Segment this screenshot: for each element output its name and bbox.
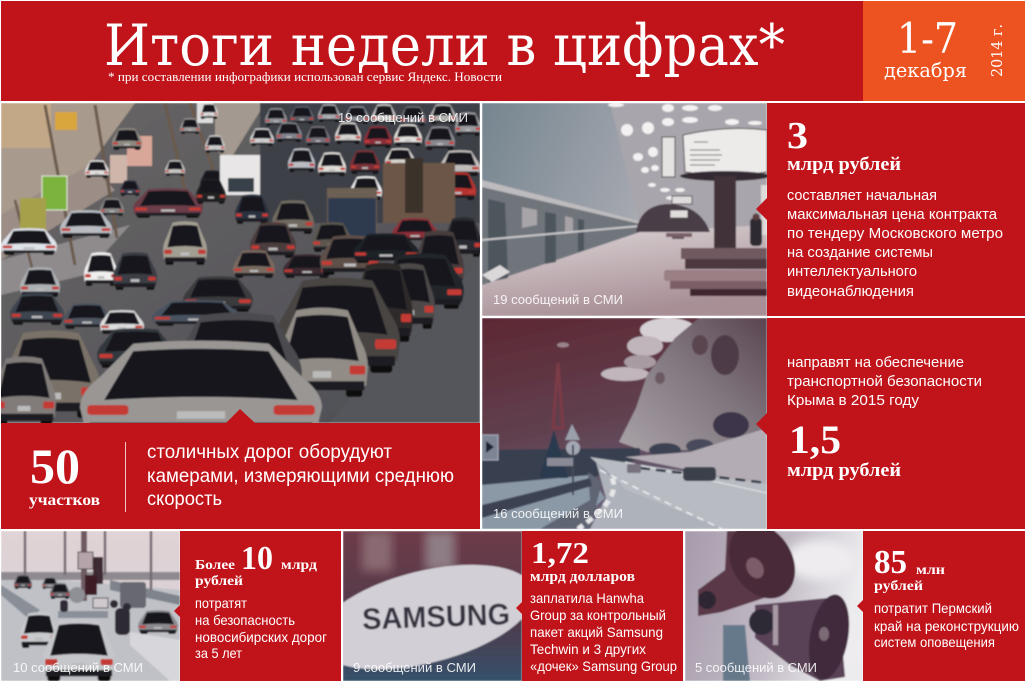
- poles: [25, 531, 151, 590]
- concrete barrier: [130, 632, 180, 681]
- amount heading: млрд: [281, 558, 317, 573]
- panel: 50 sections: [1, 409, 480, 529]
- cars far: [85, 103, 481, 223]
- unit: млрд рублей: [787, 461, 901, 481]
- amount heading: 10: [241, 540, 273, 577]
- description: систем оповещения: [874, 634, 995, 650]
- cars on road: [627, 464, 716, 481]
- pointer: [226, 409, 255, 423]
- description: [787, 354, 982, 409]
- cliff: [619, 318, 767, 452]
- ceiling lamps: [608, 103, 762, 200]
- description: потратит Пермский: [874, 600, 992, 616]
- upper horn: [697, 531, 796, 616]
- guard rail: [482, 478, 592, 518]
- amount heading: млн: [916, 563, 945, 578]
- amount heading: рублей: [874, 579, 923, 594]
- vehicles: [14, 575, 178, 681]
- road: [590, 457, 767, 529]
- description: составляет начальная: [787, 187, 937, 204]
- panel: Perm 85 million: [857, 531, 1025, 681]
- cars middle: [1, 178, 482, 297]
- description: [874, 600, 1019, 650]
- description: по тендеру Московского метро: [787, 225, 1003, 242]
- description: интеллектуального: [787, 263, 917, 280]
- description: направят на обеспечение: [787, 354, 964, 371]
- officers: [60, 600, 131, 635]
- amount heading: рублей: [195, 574, 243, 589]
- month: декабря: [884, 58, 967, 82]
- description: пакет акций Samsung: [530, 624, 663, 640]
- lower horn: [749, 591, 855, 681]
- description: Крыма в 2015 году: [787, 392, 920, 409]
- pointer: [516, 602, 522, 614]
- unit: млрд долларов: [530, 569, 635, 585]
- description: [530, 590, 677, 674]
- description: видеонаблюдения: [787, 283, 914, 300]
- panel: Crimea road photo: [482, 318, 767, 529]
- column and benches: [664, 171, 770, 296]
- amount heading: 85: [874, 544, 907, 581]
- description: камерами, измеряющими среднюю: [147, 465, 454, 487]
- description: [147, 441, 454, 510]
- poles and billboards: [15, 103, 215, 268]
- tree, tower, signs: [482, 363, 580, 495]
- description: «дочек» Samsung Group: [530, 658, 677, 674]
- cars near: [0, 253, 464, 440]
- panel: Novosibirsk road photo: [1, 531, 180, 681]
- date range: 1-7: [897, 14, 958, 63]
- panel: metro photo: [482, 103, 770, 316]
- description: потратят: [195, 595, 248, 611]
- panel: traffic photo: [0, 103, 482, 440]
- media count: 5 сообщений в СМИ: [695, 660, 817, 675]
- description: заплатила Hanwha: [530, 590, 644, 606]
- sea and vegetation: [482, 448, 640, 487]
- description: скорость: [147, 488, 222, 510]
- media count: 10 сообщений в СМИ: [13, 660, 143, 675]
- description: край на реконструкцию: [874, 618, 1019, 634]
- pole: [723, 625, 750, 681]
- number: 1,72: [531, 535, 589, 570]
- media count: 9 сообщений в СМИ: [353, 660, 476, 675]
- media count: 16 сообщений в СМИ: [493, 506, 623, 521]
- panel: loudspeakers photo: [685, 531, 863, 681]
- panel: Novosibirsk 10 billion: [174, 531, 341, 681]
- clouds: [557, 318, 696, 381]
- number: 3: [787, 115, 808, 157]
- pointer: [174, 605, 180, 617]
- pointer: [756, 198, 767, 220]
- pointer: [756, 413, 767, 435]
- description: столичных дорог оборудуют: [147, 441, 392, 463]
- unit: участков: [29, 492, 100, 509]
- panel: 1.5 billion rubles: [756, 318, 1025, 529]
- media count: 19 сообщений в СМИ: [338, 110, 468, 125]
- title: Итоги недели в цифрах*: [104, 13, 785, 79]
- panel: 3 billion rubles: [756, 103, 1025, 316]
- pointer: [857, 600, 863, 612]
- description: [787, 187, 1003, 300]
- description: на безопасность: [195, 612, 295, 628]
- amount heading: [874, 544, 945, 594]
- description: транспортной безопасности: [787, 373, 982, 390]
- footnote: * при составлении инфографики использован сервис Яндекс. Новости: [108, 70, 502, 84]
- tunnel: [636, 204, 710, 232]
- date block: [863, 1, 1025, 101]
- panel: Samsung 1.72 billion: [516, 531, 683, 681]
- truck and van: [220, 155, 455, 238]
- description: Techwin и 3 других: [530, 641, 646, 657]
- hillside: [625, 428, 767, 486]
- media count: 19 сообщений в СМИ: [493, 292, 623, 307]
- number: 50: [30, 438, 80, 494]
- train: [482, 180, 640, 285]
- year: 2014 г.: [988, 24, 1006, 77]
- amount heading: Более: [195, 558, 235, 573]
- description: за 5 лет: [195, 645, 243, 661]
- traffic light: [69, 531, 108, 608]
- header banner: [1, 1, 863, 101]
- unit: млрд рублей: [787, 155, 901, 175]
- amount heading: [195, 540, 317, 589]
- logo: SAMSUNG: [362, 598, 511, 636]
- panel: Samsung photo: [343, 531, 522, 681]
- number: 1,5: [789, 417, 841, 462]
- description: [195, 595, 327, 661]
- description: на создание системы: [787, 244, 933, 261]
- description: новосибирских дорог: [195, 629, 327, 645]
- description: Group за контрольный: [530, 607, 666, 623]
- signage: [662, 128, 767, 218]
- description: максимальная цена контракта: [787, 206, 998, 223]
